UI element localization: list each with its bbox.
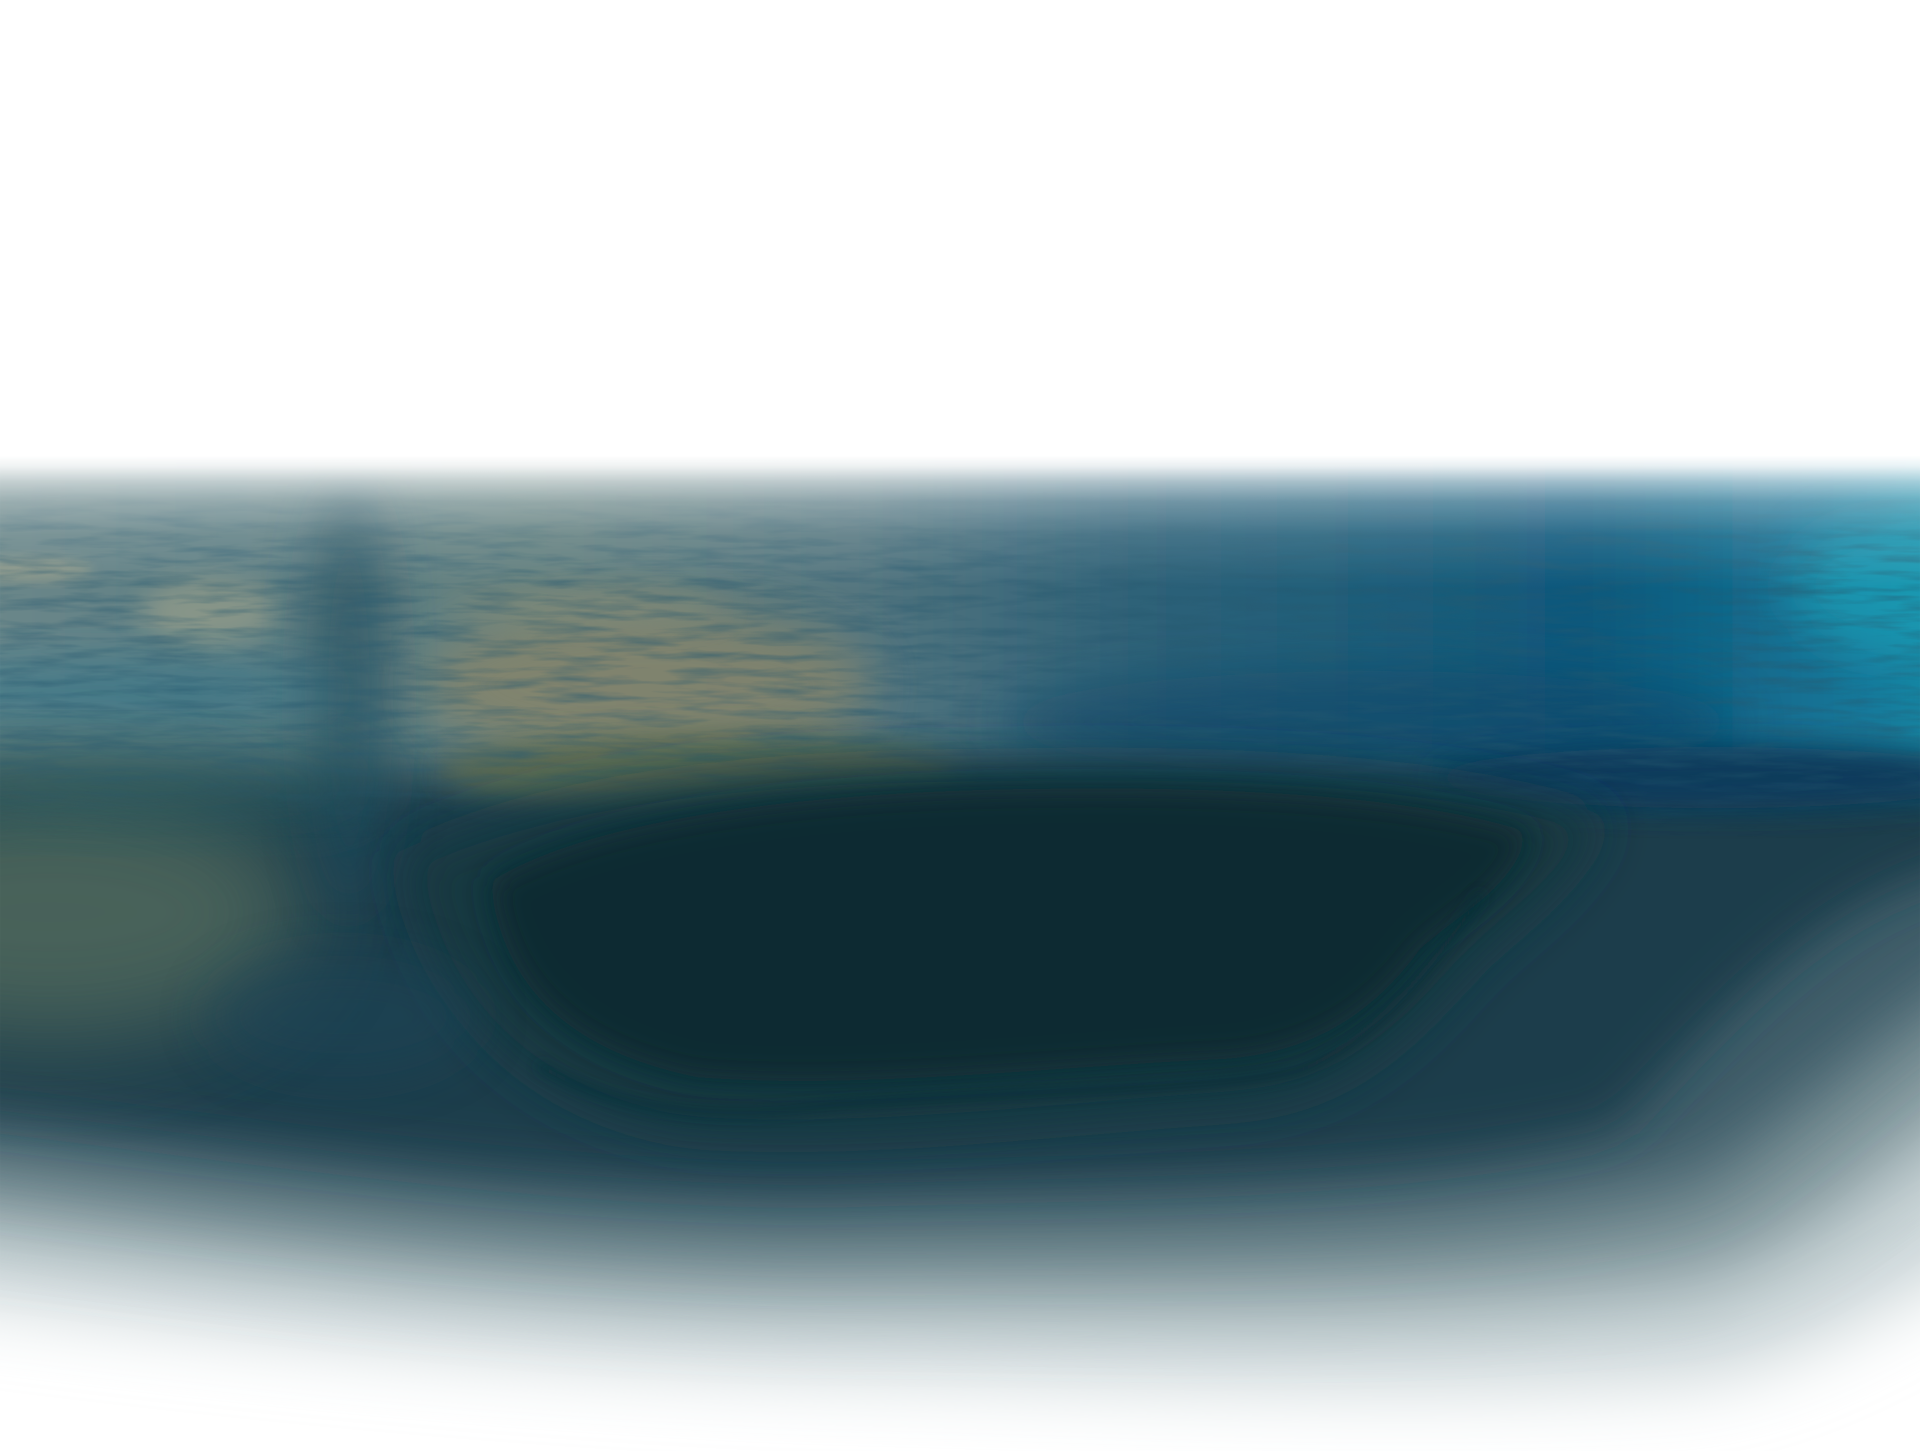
cyan right glow [1788, 520, 1920, 655]
shadow column at left [305, 478, 393, 918]
outer soft lower fade [0, 729, 1920, 1422]
deep dark basin [490, 788, 1531, 1081]
left teal band [0, 660, 343, 724]
deep blue right band [1004, 671, 1739, 774]
water surface band [0, 416, 1920, 771]
lower left olive haze [0, 784, 306, 1041]
surface ripples [0, 514, 1920, 785]
central sand patch [429, 610, 869, 762]
left pale sand patch [141, 578, 276, 647]
basin contour [576, 1080, 776, 1114]
blue shadow mid left [226, 986, 274, 1004]
ocean body [0, 416, 1920, 1385]
mid basin halo [404, 764, 1604, 1136]
illustration: ocean water body fading into white [0, 459, 1920, 1422]
